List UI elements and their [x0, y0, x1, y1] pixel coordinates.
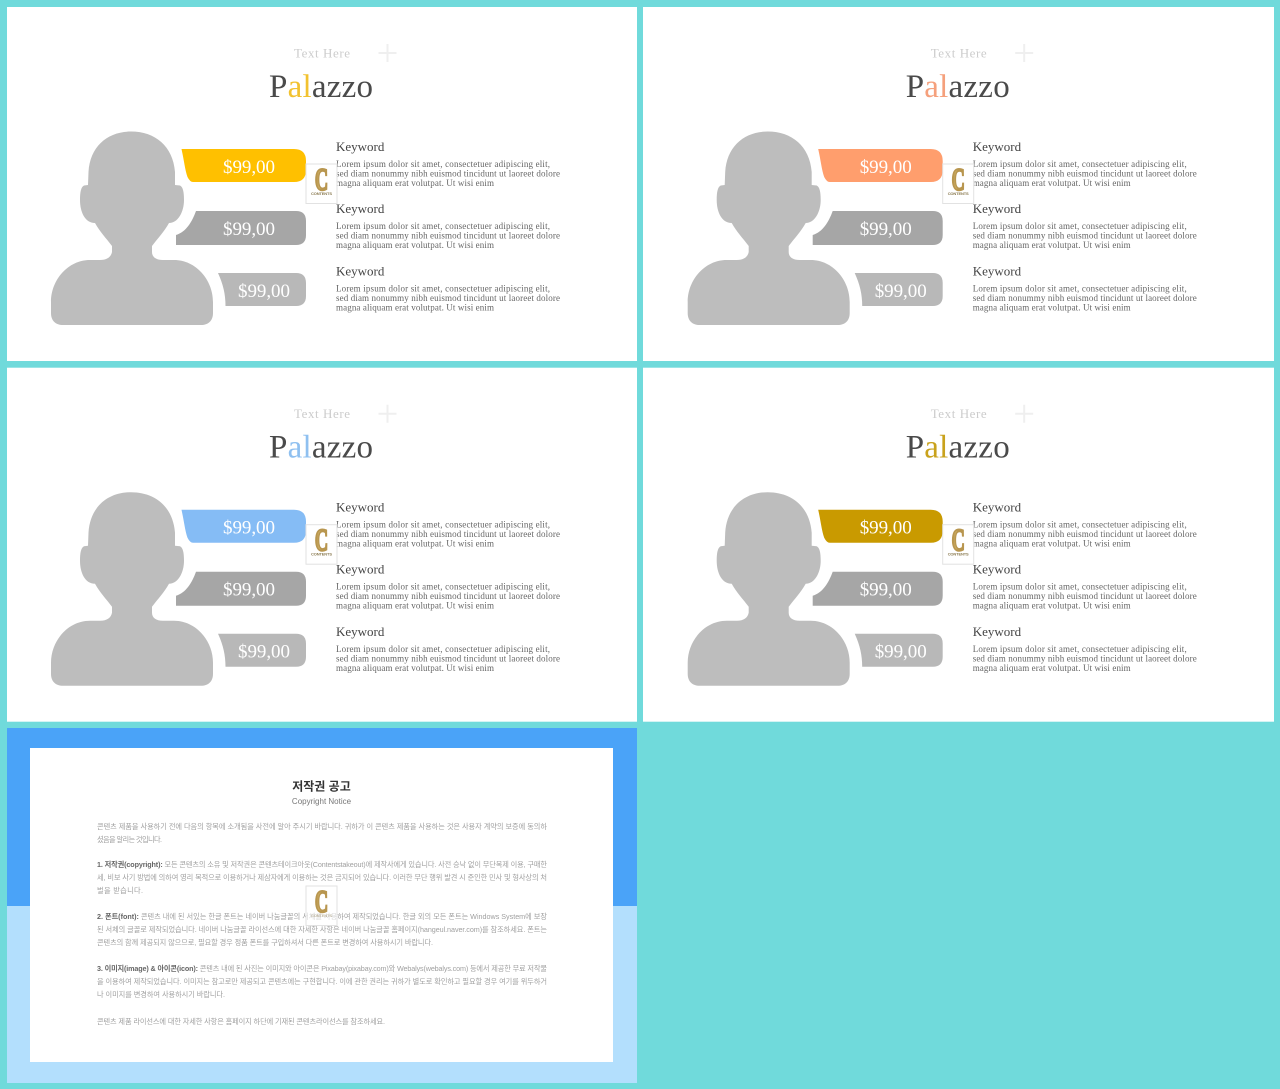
notice section 2: font: 2. 폰트(font): 콘텐츠 내에 된 서있는 한글 폰트는 네이버 나눔글꼴의 서체를 사용하여 제작되었습니다. 한글 외의 모든 폰트는 Windows System에 보장 — [97, 912, 547, 921]
text block: keyword 1 — [973, 500, 1197, 549]
bubble: middle price: $99,00 — [223, 580, 275, 601]
notice section 2: font — [97, 912, 547, 947]
logo watermark: C — [315, 523, 328, 558]
bubble: middle price: $99,00 — [860, 580, 912, 601]
text block: keyword 3: magna aliquam erat volutpat. Ut wisi enim — [336, 302, 494, 312]
subtitle: Text Here — [931, 406, 987, 421]
icon: plus — [1015, 44, 1033, 62]
icon: plus — [378, 44, 396, 62]
text block: keyword 1: Lorem ipsum dolor sit amet, consectetuer adipiscing elit, — [336, 159, 550, 169]
logo watermark: CONTENTS — [311, 913, 332, 918]
logo watermark: C — [315, 162, 328, 197]
text block: keyword 2: Lorem ipsum dolor sit amet, consectetuer adipiscing elit, — [973, 582, 1187, 592]
text block: keyword 3: Lorem ipsum dolor sit amet, consectetuer adipiscing elit, — [336, 284, 550, 294]
bubble: top price: $99,00 — [860, 518, 912, 539]
panel: orange slide — [643, 7, 1274, 361]
bubble: top price — [182, 149, 306, 182]
logo watermark — [306, 884, 337, 926]
notice section 1: copyright — [97, 860, 547, 895]
icon: person silhouette — [51, 132, 213, 325]
notice section 3: image and icon: 나 이미지를 변경하여 사용하시기 바랍니다. — [97, 990, 225, 999]
bubble: middle price: $99,00 — [223, 219, 275, 240]
text block: keyword 2: sed diam nonummy nibh euismod tincidunt ut laoreet dolore — [336, 230, 560, 240]
text block: keyword 2: magna aliquam erat volutpat. Ut wisi enim — [973, 240, 1131, 250]
text block: keyword 1: Lorem ipsum dolor sit amet, consectetuer adipiscing elit, — [973, 159, 1187, 169]
bubble: top price — [818, 510, 943, 543]
text block: keyword 2 — [973, 201, 1197, 250]
subtitle: Text Here — [931, 46, 987, 60]
text block: keyword 3: Keyword — [973, 264, 1022, 278]
text block: keyword 3: magna aliquam erat volutpat. Ut wisi enim — [336, 663, 494, 673]
logo watermark: CONTENTS — [311, 552, 332, 557]
notice section 3: image and icon: 을 이용하여 제작되었습니다. 이미지는 참고로만 제공되고 콘텐츠에는 구현합니다. 이에 관한 권리는 귀하가 별도로 확인하고 필요할 경우 여기를 위두하거 — [97, 977, 547, 986]
icon: person silhouette — [688, 492, 850, 686]
subtitle: Text Here — [294, 46, 350, 60]
text block: keyword 2: sed diam nonummy nibh euismod tincidunt ut laoreet dolore — [973, 230, 1197, 240]
panel: yellow slide — [7, 7, 637, 361]
text block: keyword 2: magna aliquam erat volutpat. Ut wisi enim — [336, 240, 494, 250]
notice subheading: Copyright Notice — [292, 797, 352, 806]
text block: keyword 2: Lorem ipsum dolor sit amet, consectetuer adipiscing elit, — [973, 221, 1187, 231]
logo watermark: CONTENTS — [948, 552, 969, 557]
bubble: top price — [818, 149, 943, 182]
text block: keyword 3 — [336, 264, 560, 312]
panel: copyright notice — [7, 728, 637, 1083]
text block: keyword 2: Keyword — [973, 562, 1022, 577]
bubble: top price — [182, 510, 306, 543]
text block: keyword 3: sed diam nonummy nibh euismod tincidunt ut laoreet dolore — [973, 293, 1197, 303]
text block: keyword 2: magna aliquam erat volutpat. Ut wisi enim — [973, 601, 1131, 611]
logo watermark: C — [315, 884, 328, 919]
bubble: bottom price — [855, 634, 943, 667]
icon: person silhouette — [51, 492, 213, 686]
notice section 3: image and icon: 3. 이미지(image) & 아이콘(icon): 콘텐츠 내에 된 사진는 이미지와 아이콘은 Pixabay(pixabay.com)와 Webalys(webalys.com) 등에서 제공한 무료 저작물 — [97, 964, 547, 973]
text block: keyword 2: Keyword — [336, 201, 385, 216]
text block: keyword 1: Lorem ipsum dolor sit amet, consectetuer adipiscing elit, — [336, 520, 550, 530]
logo watermark: CONTENTS — [311, 191, 332, 196]
bubble: bottom price: $99,00 — [238, 642, 290, 663]
bubble: top price: $99,00 — [223, 157, 275, 178]
logo watermark: C — [952, 162, 965, 197]
bubble: middle price: $99,00 — [860, 219, 912, 240]
bubble: middle price — [813, 211, 943, 245]
text block: keyword 2: magna aliquam erat volutpat. Ut wisi enim — [336, 601, 494, 611]
bubble: bottom price: $99,00 — [238, 281, 290, 302]
text block: keyword 1 — [973, 139, 1197, 188]
subtitle: Text Here — [294, 406, 350, 421]
text block: keyword 3: magna aliquam erat volutpat. Ut wisi enim — [973, 302, 1131, 312]
bubble: bottom price — [218, 273, 306, 306]
bubble: bottom price: $99,00 — [875, 642, 927, 663]
text block: keyword 1: sed diam nonummy nibh euismod tincidunt ut laoreet dolore — [336, 168, 560, 178]
panel: gold slide — [643, 368, 1274, 722]
text block: keyword 2: Keyword — [973, 201, 1022, 216]
notice section 2: font: 콘텐츠의 함께 제공되지 않으므로, 필요할 경우 정품 폰트를 구입하셔서 다른 폰트로 변경하여 사용하시기 바랍니다. — [97, 938, 433, 947]
text block: keyword 1: magna aliquam erat volutpat. Ut wisi enim — [973, 539, 1131, 549]
title: Palazzo — [269, 430, 373, 466]
text block: keyword 1 — [336, 139, 560, 188]
icon: plus — [1015, 405, 1033, 423]
text block: keyword 3: Keyword — [973, 624, 1022, 639]
panel: blue slide — [7, 368, 637, 722]
text block: keyword 2: sed diam nonummy nibh euismod tincidunt ut laoreet dolore — [973, 591, 1197, 601]
text block: keyword 1: sed diam nonummy nibh euismod tincidunt ut laoreet dolore — [973, 168, 1197, 178]
bubble: top price: $99,00 — [860, 157, 912, 178]
bubble: middle price — [176, 211, 306, 245]
text block: keyword 3: Lorem ipsum dolor sit amet, consectetuer adipiscing elit, — [973, 644, 1187, 654]
notice section 3: image and icon — [97, 964, 547, 999]
text block: keyword 2 — [336, 201, 560, 250]
text block: keyword 3 — [973, 264, 1197, 312]
bubble: bottom price — [218, 634, 306, 667]
text block: keyword 3: Lorem ipsum dolor sit amet, consectetuer adipiscing elit, — [336, 644, 550, 654]
title: Palazzo — [906, 430, 1010, 466]
text block: keyword 2: Keyword — [336, 562, 385, 577]
title: Palazzo — [269, 69, 373, 105]
icon: plus — [378, 405, 396, 423]
bubble: bottom price: $99,00 — [875, 281, 927, 302]
notice section 2: font: 된 서체의 글꼴로 제작되었습니다. 네이버 나눔글꼴 라이선스에 대한 자세한 사항은 네이버 나눔글꼴 홈페이지(hangeul.naver.com)를 참조하세요. 폰트는 — [97, 925, 547, 934]
text block: keyword 1: Keyword — [973, 500, 1022, 515]
logo watermark — [943, 523, 974, 564]
notice intro: 셨음을 알리는 것입니다. — [97, 835, 162, 844]
text block: keyword 3 — [973, 624, 1197, 673]
text block: keyword 3: Lorem ipsum dolor sit amet, consectetuer adipiscing elit, — [973, 284, 1187, 294]
text block: keyword 2 — [336, 562, 560, 611]
notice section 1: copyright: 세, 비보 사기 방법에 의하여 영리 목적으로 이용하거나 제삼자에게 이용하는 것은 금지되어 있습니다. 이러한 무단 행위 발견 시 준인한 민사 및 형사상의 처 — [97, 873, 547, 882]
bubble: bottom price — [855, 273, 943, 306]
text block: keyword 3: magna aliquam erat volutpat. Ut wisi enim — [973, 663, 1131, 673]
notice footer line: 콘텐츠 제품 라이선스에 대한 자세한 사항은 홈페이지 하단에 기재된 콘텐츠라이선스를 참조하세요. — [97, 1017, 385, 1026]
notice intro: 콘텐츠 제품을 사용하기 전에 다음의 항목에 소개됨을 사전에 알아 주시기 바랍니다. 귀하가 이 콘텐츠 제품을 사용하는 것은 사용자 계약의 보증에 동의하 — [97, 822, 547, 831]
text block: keyword 1: sed diam nonummy nibh euismod tincidunt ut laoreet dolore — [336, 529, 560, 539]
text block: keyword 2: Lorem ipsum dolor sit amet, consectetuer adipiscing elit, — [336, 221, 550, 231]
text block: keyword 3: sed diam nonummy nibh euismod tincidunt ut laoreet dolore — [973, 654, 1197, 664]
text block: keyword 1 — [336, 500, 560, 549]
text block: keyword 1: magna aliquam erat volutpat. Ut wisi enim — [973, 178, 1131, 188]
text block: keyword 3: Keyword — [336, 264, 385, 278]
text block: keyword 1: Keyword — [336, 500, 385, 515]
text block: keyword 1: Keyword — [973, 139, 1022, 154]
title: Palazzo — [906, 69, 1010, 105]
text block: keyword 1: Keyword — [336, 139, 385, 154]
text block: keyword 1: magna aliquam erat volutpat. Ut wisi enim — [336, 178, 494, 188]
text block: keyword 2: sed diam nonummy nibh euismod tincidunt ut laoreet dolore — [336, 591, 560, 601]
logo watermark: CONTENTS — [948, 191, 969, 196]
bubble: middle price — [176, 572, 306, 606]
logo watermark: C — [952, 523, 965, 558]
notice heading: 저작권 공고 — [292, 778, 351, 794]
logo watermark — [943, 162, 974, 204]
bubble: top price: $99,00 — [223, 518, 275, 539]
text block: keyword 3 — [336, 624, 560, 673]
logo watermark — [306, 162, 337, 204]
text block: keyword 2 — [973, 562, 1197, 611]
text block: keyword 3: sed diam nonummy nibh euismod tincidunt ut laoreet dolore — [336, 293, 560, 303]
text block: keyword 2: Lorem ipsum dolor sit amet, consectetuer adipiscing elit, — [336, 582, 550, 592]
text block: keyword 1: magna aliquam erat volutpat. Ut wisi enim — [336, 539, 494, 549]
text block: keyword 3: sed diam nonummy nibh euismod tincidunt ut laoreet dolore — [336, 654, 560, 664]
icon: person silhouette — [688, 132, 850, 325]
bubble: middle price — [813, 572, 943, 606]
text block: keyword 3: Keyword — [336, 624, 385, 639]
text block: keyword 1: sed diam nonummy nibh euismod tincidunt ut laoreet dolore — [973, 529, 1197, 539]
notice section 1: copyright: 1. 저작권(copyright): 모든 콘텐츠의 소유 및 저작권은 콘텐츠테이크아웃(Contentstakeout)에 제작사에게 있습니다. 사전 승낙 없이 무단복제 이용, 구매한 — [97, 860, 547, 869]
text block: keyword 1: Lorem ipsum dolor sit amet, consectetuer adipiscing elit, — [973, 520, 1187, 530]
notice intro — [97, 822, 547, 844]
logo watermark — [306, 523, 337, 564]
notice section 1: copyright: 벌을 받습니다. — [97, 886, 143, 895]
